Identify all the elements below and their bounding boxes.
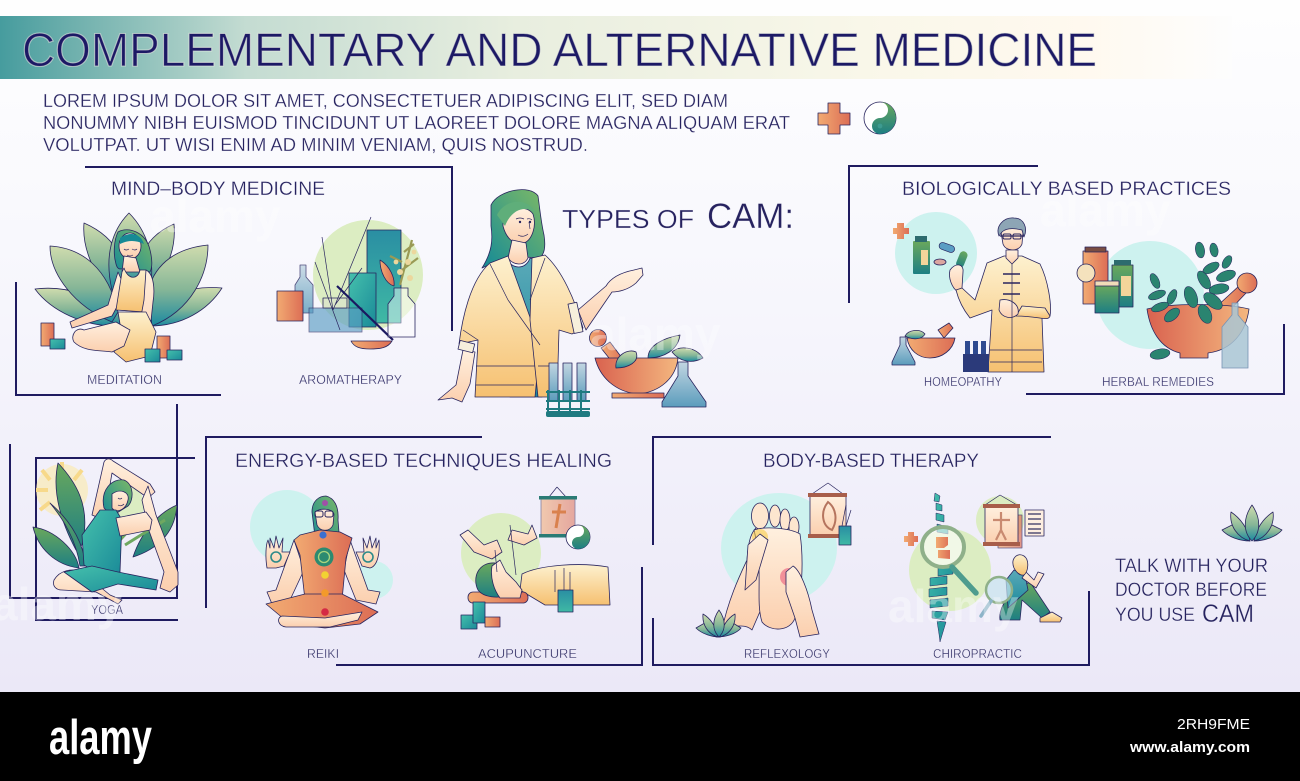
acupuncture illustration [460,487,610,629]
label: chiropractic: CHIROPRACTIC [933,647,1022,661]
icon: lotus top of callout [1222,505,1282,541]
callout: talk with your doctor: CAM [1202,600,1254,628]
stock watermarks: alamy [888,580,1019,632]
intro text block: NONUMMY NIBH EUISMOD TINCIDUNT UT LAOREET DOLORE MAGNA ALIQUAM ERAT [43,112,790,133]
reiki illustration [250,490,393,628]
stock watermarks: alamy [590,308,721,360]
panel: energy-based techniques [235,451,612,661]
panel: yoga [33,459,178,617]
intro text block: VOLUTPAT. UT WISI ENIM AD MINIM VENIAM, QUIS NOSTRUD. [43,134,588,155]
label: reiki: REIKI [307,647,339,661]
panel frames [10,166,1284,665]
heading: types of cam [562,197,794,236]
callout: talk with your doctor: TALK WITH YOUR [1115,555,1268,577]
icon: small lotus [696,610,741,637]
aromatherapy illustration [277,217,423,349]
icon: yin yang [864,102,896,134]
stock watermarks [0,184,1171,632]
heading: energy-based: ENERGY-BASED TECHNIQUES HEALING [235,451,612,472]
image id and site: www.alamy.com [1129,739,1250,756]
stock watermarks: alamy [150,190,281,242]
label: acupuncture: ACUPUNCTURE [478,647,577,661]
label: homeopathy: HOMEOPATHY [924,375,1003,389]
intro text block [43,90,790,155]
panel: body-based therapy [696,451,1062,661]
label: herbal remedies: HERBAL REMEDIES [1102,375,1214,389]
image id and site: 2RH9FME [1177,716,1250,733]
icon: medical cross [818,103,850,134]
intro text block: LOREM IPSUM DOLOR SIT AMET, CONSECTETUER ADIPISCING ELIT, SED DIAM [43,90,728,111]
label: yoga: YOGA [91,603,124,617]
herbal remedies illustration [1077,241,1257,368]
callout: talk with your doctor: YOU USE [1115,604,1195,626]
callout: talk with your doctor [1115,555,1268,628]
panel: biologically based practices [892,179,1257,389]
heading: types of cam: CAM: [707,197,794,236]
label: aromatherapy: AROMATHERAPY [299,373,403,387]
stock watermarks: alamy [1040,184,1171,236]
heading: mind-body: MIND–BODY MEDICINE [111,179,325,200]
heading: types of cam: TYPES OF [562,204,694,234]
label: reflexology: REFLEXOLOGY [744,647,831,661]
yoga illustration [33,459,178,604]
footer band [0,692,1300,781]
image id and site [1129,716,1250,756]
doctor illustration [438,190,643,402]
panel: types of cam [438,190,794,417]
panel: mind-body medicine [35,179,423,387]
title band [0,16,1232,79]
chiropractic illustration [904,493,1062,642]
title: COMPLEMENTARY AND ALTERNATIVE MEDICINE [22,23,1097,76]
heading: body-based: BODY-BASED THERAPY [763,451,979,472]
footer logo: alamy [49,711,152,765]
meditation illustration [35,213,222,362]
mortar with herbs and flask [590,330,706,407]
reflexology illustration [721,483,851,637]
heading: biologically based: BIOLOGICALLY BASED PRACTICES [902,179,1231,200]
test tube rack [546,363,590,417]
callout: talk with your doctor: DOCTOR BEFORE [1115,579,1267,601]
homeopathy illustration [892,212,1051,372]
label: meditation: MEDITATION [87,373,162,387]
